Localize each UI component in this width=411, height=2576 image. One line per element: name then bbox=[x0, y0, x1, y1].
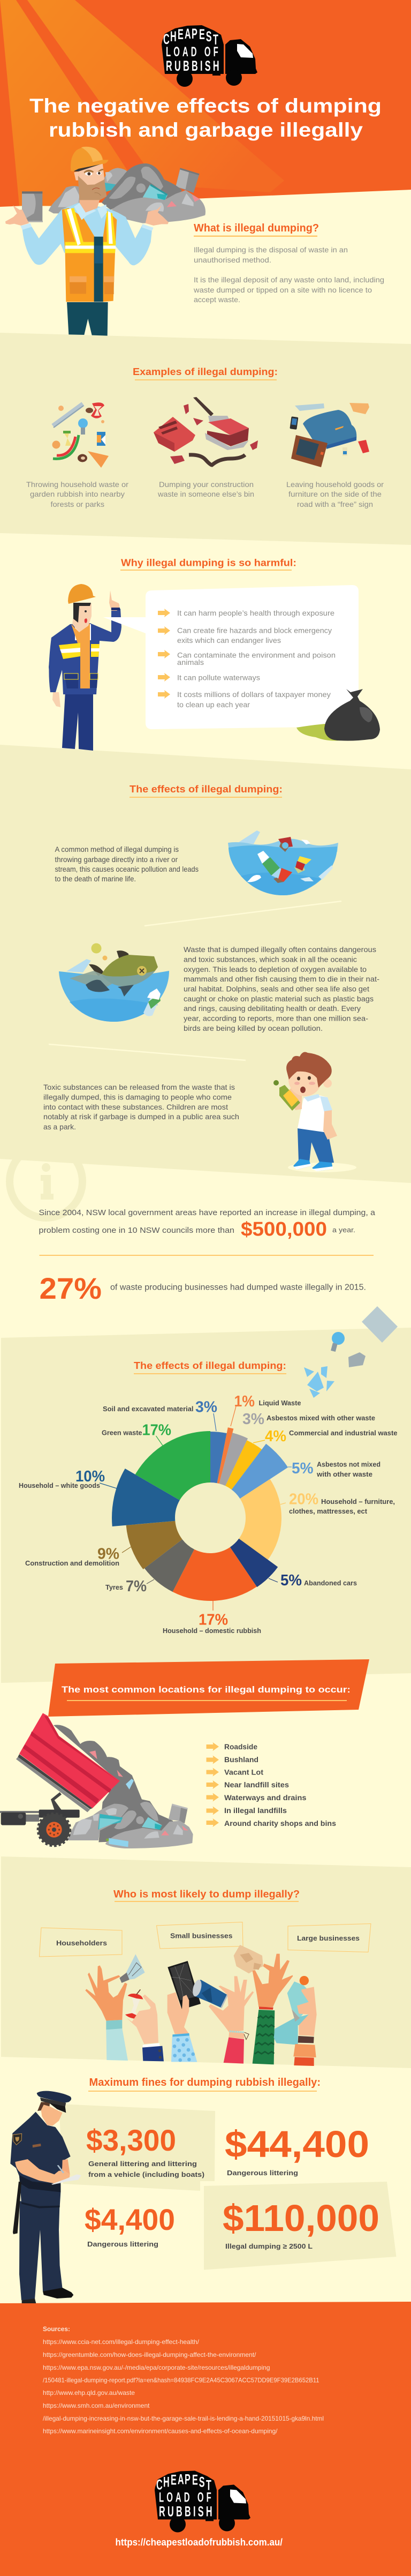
chart labels: Household – white goods bbox=[19, 1481, 100, 1489]
footer background bbox=[0, 2302, 411, 2576]
background bands bbox=[0, 333, 411, 2068]
fine: $3,300: from a vehicle (including boats) bbox=[88, 2170, 204, 2178]
chart labels: 5% bbox=[280, 1572, 302, 1589]
illustration: worker shrugging bbox=[5, 147, 169, 336]
chart labels: clothes, mattresses, ect bbox=[289, 1507, 368, 1515]
divider bbox=[144, 901, 341, 926]
stat: cost to councils bbox=[39, 1208, 376, 1240]
chart labels: Green waste bbox=[102, 1428, 142, 1437]
list: harms bbox=[158, 609, 336, 709]
what is illegal dumping text block: What is illegal dumping? bbox=[194, 222, 319, 234]
what is illegal dumping text block: It is the illegal deposit of any waste onto land, including bbox=[194, 275, 384, 284]
list: harms: to clean up each year bbox=[177, 700, 250, 709]
chart labels: with other waste bbox=[316, 1470, 372, 1478]
sources: Sources: bbox=[43, 2325, 70, 2333]
arm 6 with plastic bottle bbox=[274, 1976, 317, 2066]
box: large businesses bbox=[288, 1923, 371, 1952]
chart labels: 5% bbox=[292, 1460, 314, 1477]
what is illegal dumping text block: waste dumped or tipped on a site with no licence to bbox=[193, 286, 372, 294]
chart labels: 3% bbox=[242, 1411, 264, 1428]
chart labels: 4% bbox=[265, 1428, 286, 1445]
chart labels: 7% bbox=[126, 1578, 147, 1595]
list: locations: Near landfill sites bbox=[224, 1780, 289, 1789]
list: locations: Roadside bbox=[224, 1742, 257, 1751]
captions: examples bbox=[26, 480, 384, 508]
icon: household waste bbox=[52, 402, 109, 468]
list: harms: It can pollute waterways bbox=[177, 673, 260, 682]
sources: /150481-illegal-dumping-report.pdf?la=en&hash=84938FC9E2A45C3067ACC57DD9E9F39E2B652B11 bbox=[43, 2377, 319, 2384]
title: The negative effects of dumping bbox=[29, 95, 382, 117]
list: harms: exits which can endanger lives bbox=[177, 636, 281, 645]
heading: examples: Examples of illegal dumping: bbox=[133, 366, 278, 377]
panel: fine backgrounds bbox=[59, 2104, 396, 2270]
text: toxic oxygen depletion: oxygen. This leads to depletion of oxygen available to bbox=[184, 965, 367, 974]
list: harms: Can create fire hazards and block emergency bbox=[177, 626, 332, 634]
text: toxic substances and children: notably at risk if garbage is dumped in a public area such bbox=[43, 1112, 239, 1121]
illustration: worker pointing bbox=[49, 584, 121, 751]
box: small businesses bbox=[156, 1922, 243, 1949]
list: harms: It can harm people’s health through exposure bbox=[177, 609, 334, 617]
chart labels bbox=[19, 1393, 397, 1635]
logo: truck top: LOAD OF bbox=[166, 44, 218, 59]
header background bbox=[0, 0, 411, 207]
chart labels: 17% bbox=[142, 1422, 171, 1439]
sources: /illegal-dumping-increasing-in-nsw-but-the-garage-sale-trail-is-lending-a-hand-20151015-gka9ln.html bbox=[43, 2415, 324, 2422]
banner: most common locations: The most common locations for illegal dumping to occur: bbox=[62, 1684, 351, 1695]
chart labels: Asbestos mixed with other waste bbox=[267, 1414, 375, 1422]
illustration: garbage bag bbox=[296, 689, 380, 741]
captions: examples: Leaving household goods or bbox=[286, 480, 384, 489]
text: toxic oxygen depletion: year, according to reports, more than one million sea- bbox=[184, 1014, 368, 1022]
banner: most common locations bbox=[48, 1659, 369, 1717]
stat: 27%: of waste producing businesses had dumped waste illegally in 2015. bbox=[110, 1283, 366, 1292]
fine: $4,400: $4,400 bbox=[85, 2203, 175, 2236]
chart labels: 3% bbox=[195, 1398, 217, 1416]
text: toxic oxygen depletion: Waste that is dumped illegally often contains dangerous bbox=[184, 945, 376, 954]
captions: examples: waste in someone else’s bin bbox=[157, 490, 254, 498]
illustration: rubbish pile behind worker bbox=[22, 163, 206, 223]
stat: cost to councils: a year. bbox=[332, 1226, 355, 1234]
list: locations: Waterways and drains bbox=[224, 1793, 307, 1802]
text: oceanic pollution bbox=[55, 845, 199, 883]
fine: $44,400: $44,400 bbox=[225, 2123, 369, 2165]
chart labels: 17% bbox=[199, 1612, 228, 1629]
fine: $44,400: Dangerous littering bbox=[227, 2169, 298, 2177]
illustration: polluted water bowl bbox=[228, 830, 338, 895]
fine: $3,300: General littering and littering bbox=[88, 2160, 197, 2168]
icon: construction waste bbox=[154, 397, 258, 465]
arm 1 with light bulb bbox=[85, 1954, 145, 2061]
text: toxic substances and children bbox=[43, 1083, 239, 1131]
chart labels: 9% bbox=[97, 1545, 119, 1562]
list: locations: Bushland bbox=[224, 1755, 258, 1764]
sources: https://www.ccia-net.com/illegal-dumping-effect-health/ bbox=[43, 2338, 200, 2346]
arm 4 with crushed can bbox=[191, 1976, 254, 2064]
text: toxic substances and children: illegally dumped, this is damaging to people who come bbox=[43, 1093, 232, 1102]
divider bbox=[49, 1044, 246, 1060]
stat: cost to councils: Since 2004, NSW local government areas have reported an increase in illegal dumping, a bbox=[39, 1208, 376, 1217]
logo: truck top bbox=[162, 25, 257, 87]
fine: $3,300: $3,300 bbox=[86, 2123, 176, 2157]
box: large businesses: Large businesses bbox=[297, 1934, 360, 1942]
chart labels: Commercial and industrial waste bbox=[289, 1429, 397, 1437]
chart labels: Construction and demolition bbox=[25, 1559, 119, 1567]
stat: cost to councils: $500,000 bbox=[241, 1218, 327, 1240]
icon: info circle bbox=[10, 1145, 82, 1218]
arm 5 with crumpled paper bbox=[234, 1945, 293, 2064]
text: toxic oxygen depletion: caught or choke on plastic material such as plastic bags bbox=[184, 994, 374, 1003]
what is illegal dumping text block: unauthorised method. bbox=[194, 256, 271, 264]
sources: https://www.marineinsight.com/environment/causes-and-effects-of-ocean-dumping/ bbox=[43, 2427, 278, 2435]
sources: https://www.epa.nsw.gov.au/-/media/epa/corporate-site/resources/illegaldumping bbox=[43, 2364, 270, 2371]
captions: examples: garden rubbish into nearby bbox=[30, 490, 125, 498]
fine: $4,400: Dangerous littering bbox=[87, 2240, 158, 2248]
box: householders: Householders bbox=[56, 1939, 107, 1947]
sources: https://greentumble.com/how-does-illegal-dumping-affect-the-environment/ bbox=[43, 2351, 256, 2358]
title bbox=[29, 95, 382, 141]
text: toxic oxygen depletion bbox=[184, 945, 379, 1032]
fine: $110,000: Illegal dumping ≥ 2500 L bbox=[225, 2242, 313, 2250]
sources: http://www.ehp.qld.gov.au/waste bbox=[43, 2389, 135, 2397]
heading: effects: The effects of illegal dumping: bbox=[130, 784, 283, 795]
illustration: dead fish in water bbox=[59, 943, 169, 1022]
text: toxic oxygen depletion: and toxic substances, which soak in all the oceanic bbox=[184, 955, 357, 963]
website url: https://cheapestloadofrubbish.com.au/ bbox=[116, 2537, 283, 2548]
illustration: dump trailer tipping rubbish bbox=[0, 1713, 193, 1848]
icon: household goods bbox=[290, 403, 369, 467]
heading: who dumps: Who is most likely to dump illegally? bbox=[113, 1889, 300, 1900]
text: toxic oxygen depletion: and rings, causing debilitating health or death. Every bbox=[184, 1004, 361, 1013]
chart labels: 20% bbox=[289, 1491, 318, 1508]
captions: examples: Throwing household waste or bbox=[26, 480, 128, 489]
text: toxic oxygen depletion: mammals and other fish causing them to die in their nat- bbox=[184, 975, 379, 983]
logo: truck bottom: LOAD OF bbox=[159, 2490, 211, 2505]
text: toxic oxygen depletion: birds are being killed by ocean pollution. bbox=[184, 1024, 323, 1032]
list: harms: It costs millions of dollars of taxpayer money bbox=[177, 690, 331, 699]
stat: cost to councils: problem costing one in 10 NSW councils more than bbox=[39, 1226, 234, 1235]
chart: donut of dumped waste types bbox=[112, 1427, 288, 1601]
chart labels: Asbestos not mixed bbox=[317, 1461, 380, 1468]
list: harms: Can contaminate the environment and poison bbox=[177, 650, 336, 659]
fine: $110,000: $110,000 bbox=[223, 2197, 379, 2239]
chart labels: Household – domestic rubbish bbox=[163, 1627, 261, 1635]
sources bbox=[43, 2325, 324, 2435]
what is illegal dumping text block bbox=[193, 222, 384, 304]
captions: examples: forests or parks bbox=[50, 500, 104, 508]
text: oceanic pollution: to the death of marine life. bbox=[55, 874, 136, 883]
logo: truck bottom: RUBBISH bbox=[159, 2503, 212, 2520]
sources: https://www.smh.com.au/environment bbox=[43, 2402, 150, 2409]
what is illegal dumping text block: Illegal dumping is the disposal of waste in an bbox=[194, 245, 348, 254]
list: locations: Vacant Lot bbox=[224, 1768, 263, 1777]
fine: $3,300 bbox=[86, 2123, 204, 2178]
stat: 27%: 27% bbox=[40, 1271, 102, 1305]
logo: truck top: RUBBISH bbox=[166, 58, 219, 74]
captions: examples: furniture on the side of the bbox=[288, 490, 382, 498]
heading: maximum fines: Maximum fines for dumping rubbish illegally: bbox=[89, 2077, 321, 2088]
stat: 27% bbox=[40, 1271, 366, 1305]
chart labels: Soil and excavated material bbox=[103, 1405, 194, 1413]
decoration: floating rubbish bbox=[304, 1306, 398, 1398]
arm 2 with apple core bbox=[125, 1989, 164, 2061]
illustration: boy with bottle bbox=[273, 1052, 356, 1172]
list: locations: Around charity shops and bins bbox=[224, 1819, 336, 1828]
panel: speech bubble bbox=[103, 585, 359, 729]
chart labels: 1% bbox=[234, 1393, 255, 1410]
illustration: raised hands holding rubbish bbox=[85, 1945, 317, 2066]
heading: why harmful: Why illegal dumping is so harmful: bbox=[121, 557, 296, 568]
chart labels: 10% bbox=[75, 1468, 105, 1485]
text: toxic oxygen depletion: ural habitat. Dolphins, seals and other sea life also get bbox=[184, 985, 369, 993]
chart labels: Tyres bbox=[105, 1583, 123, 1591]
chart labels: Household – furniture, bbox=[321, 1497, 395, 1506]
illustration: police officer bbox=[10, 2091, 81, 2303]
text: toxic substances and children: into contact with these substances. Children are most bbox=[43, 1103, 228, 1111]
captions: examples: Dumping your construction bbox=[159, 480, 254, 489]
captions: examples: road with a “free” sign bbox=[297, 500, 373, 508]
list: locations bbox=[207, 1742, 336, 1828]
title: rubbish and garbage illegally bbox=[49, 119, 363, 141]
heading: effects chart: The effects of illegal dumping: bbox=[134, 1360, 286, 1371]
text: oceanic pollution: A common method of illegal dumping is bbox=[55, 845, 179, 853]
list: harms: animals bbox=[177, 658, 204, 667]
list: locations: In illegal landfills bbox=[224, 1806, 287, 1815]
text: oceanic pollution: throwing garbage directly into a river or bbox=[55, 855, 178, 864]
chart labels: Liquid Waste bbox=[259, 1399, 301, 1407]
what is illegal dumping text block: accept waste. bbox=[194, 295, 240, 304]
logo: truck bottom: CHEAPEST bbox=[156, 2471, 211, 2493]
text: toxic substances and children: Toxic substances can be released from the waste that is bbox=[43, 1083, 235, 1091]
text: oceanic pollution: stream, this causes oceanic pollution and leads bbox=[55, 865, 199, 873]
text: toxic substances and children: as a park. bbox=[43, 1122, 76, 1131]
chart labels: Abandoned cars bbox=[304, 1579, 357, 1587]
box: householders bbox=[40, 1928, 122, 1957]
box: small businesses: Small businesses bbox=[170, 1932, 232, 1940]
logo: truck top: CHEAPEST bbox=[163, 26, 218, 48]
logo: truck bottom bbox=[155, 2471, 250, 2532]
arm 3 with cracked phone bbox=[168, 1961, 201, 2062]
